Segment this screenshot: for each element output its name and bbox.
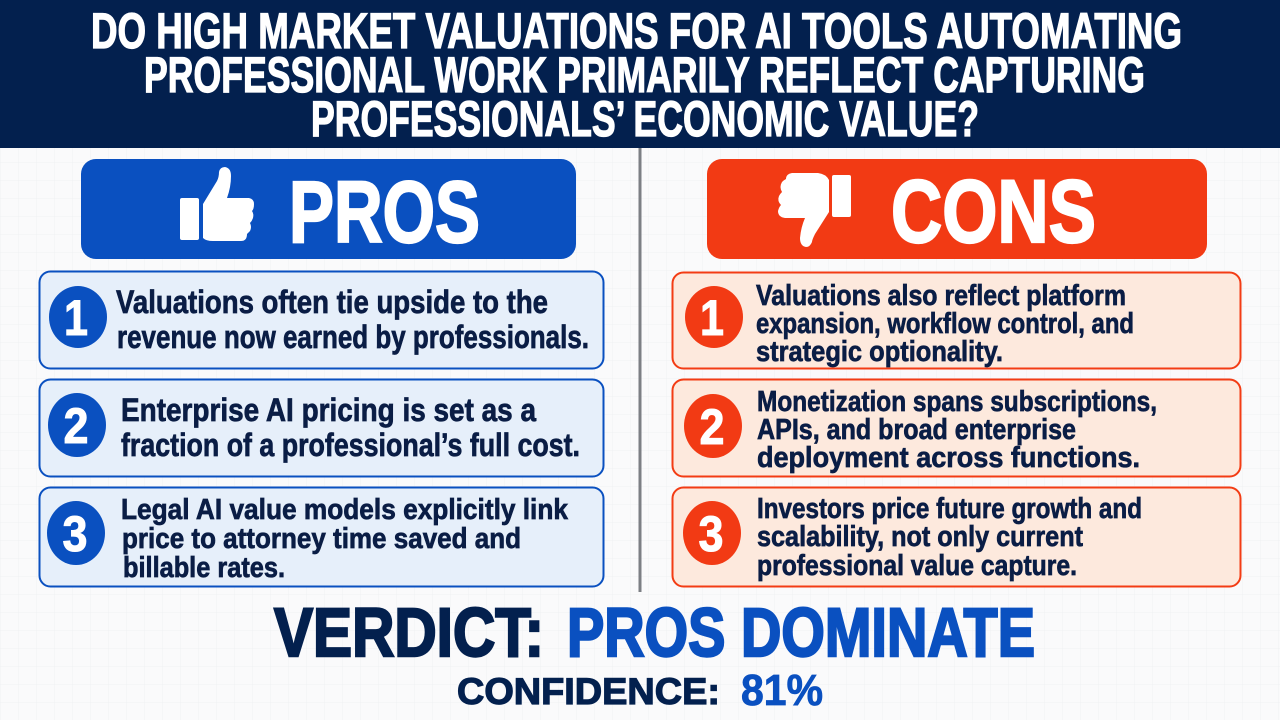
cons item 2: Monetization spans subscriptions, <box>757 386 1157 418</box>
pros item 1: Valuations often tie upside to the <box>116 284 548 320</box>
verdict <box>274 594 1035 671</box>
cons item 1 <box>672 272 1240 368</box>
cons item 1: Valuations also reflect platform <box>756 280 1126 312</box>
pros item 3: billable rates. <box>123 552 285 584</box>
pros header: PROS <box>289 164 480 261</box>
cons item 1: strategic optionality. <box>756 336 1003 368</box>
pros item 3: 3 <box>62 506 88 562</box>
pros item 2 <box>40 380 604 476</box>
pros item 3 <box>40 488 604 586</box>
cons item 2: APIs, and broad enterprise <box>757 414 1076 446</box>
cons item 3 <box>672 488 1240 586</box>
cons item 2: deployment across functions. <box>757 442 1140 474</box>
pros item 2: Enterprise AI pricing is set as a <box>121 392 536 428</box>
cons item 3: 3 <box>698 506 724 562</box>
pros item 2: 2 <box>64 398 88 454</box>
confidence: CONFIDENCE: <box>457 671 720 712</box>
pros item 1: revenue now earned by professionals. <box>117 319 589 355</box>
title banner: PROFESSIONALS’ ECONOMIC VALUE? <box>311 91 979 147</box>
title banner <box>0 0 1280 148</box>
cons item 3: professional value capture. <box>757 550 1077 582</box>
cons item 2: 2 <box>700 399 724 455</box>
cons header <box>707 159 1207 261</box>
pros header <box>81 159 576 261</box>
panel: cons <box>672 159 1240 586</box>
verdict: PROS DOMINATE <box>567 594 1035 671</box>
cons item 3: Investors price future growth and <box>757 493 1142 525</box>
cons item 2 <box>672 380 1240 476</box>
cons item 3: scalability, not only current <box>757 521 1083 553</box>
pros item 3: price to attorney time saved and <box>122 523 521 555</box>
icon: thumbs down <box>778 173 851 247</box>
pros item 1: 1 <box>64 290 88 346</box>
confidence: 81% <box>741 666 823 715</box>
verdict: VERDICT: <box>274 594 544 671</box>
pros item 1 <box>40 272 604 368</box>
pros item 2: fraction of a professional’s full cost. <box>121 427 580 463</box>
cons header: CONS <box>891 161 1096 261</box>
icon: thumbs up <box>180 167 254 241</box>
pros item 3: Legal AI value models explicitly link <box>121 494 569 526</box>
confidence <box>457 666 823 715</box>
cons item 1: 1 <box>700 290 724 346</box>
cons item 1: expansion, workflow control, and <box>756 308 1134 340</box>
panel: pros <box>40 159 604 586</box>
